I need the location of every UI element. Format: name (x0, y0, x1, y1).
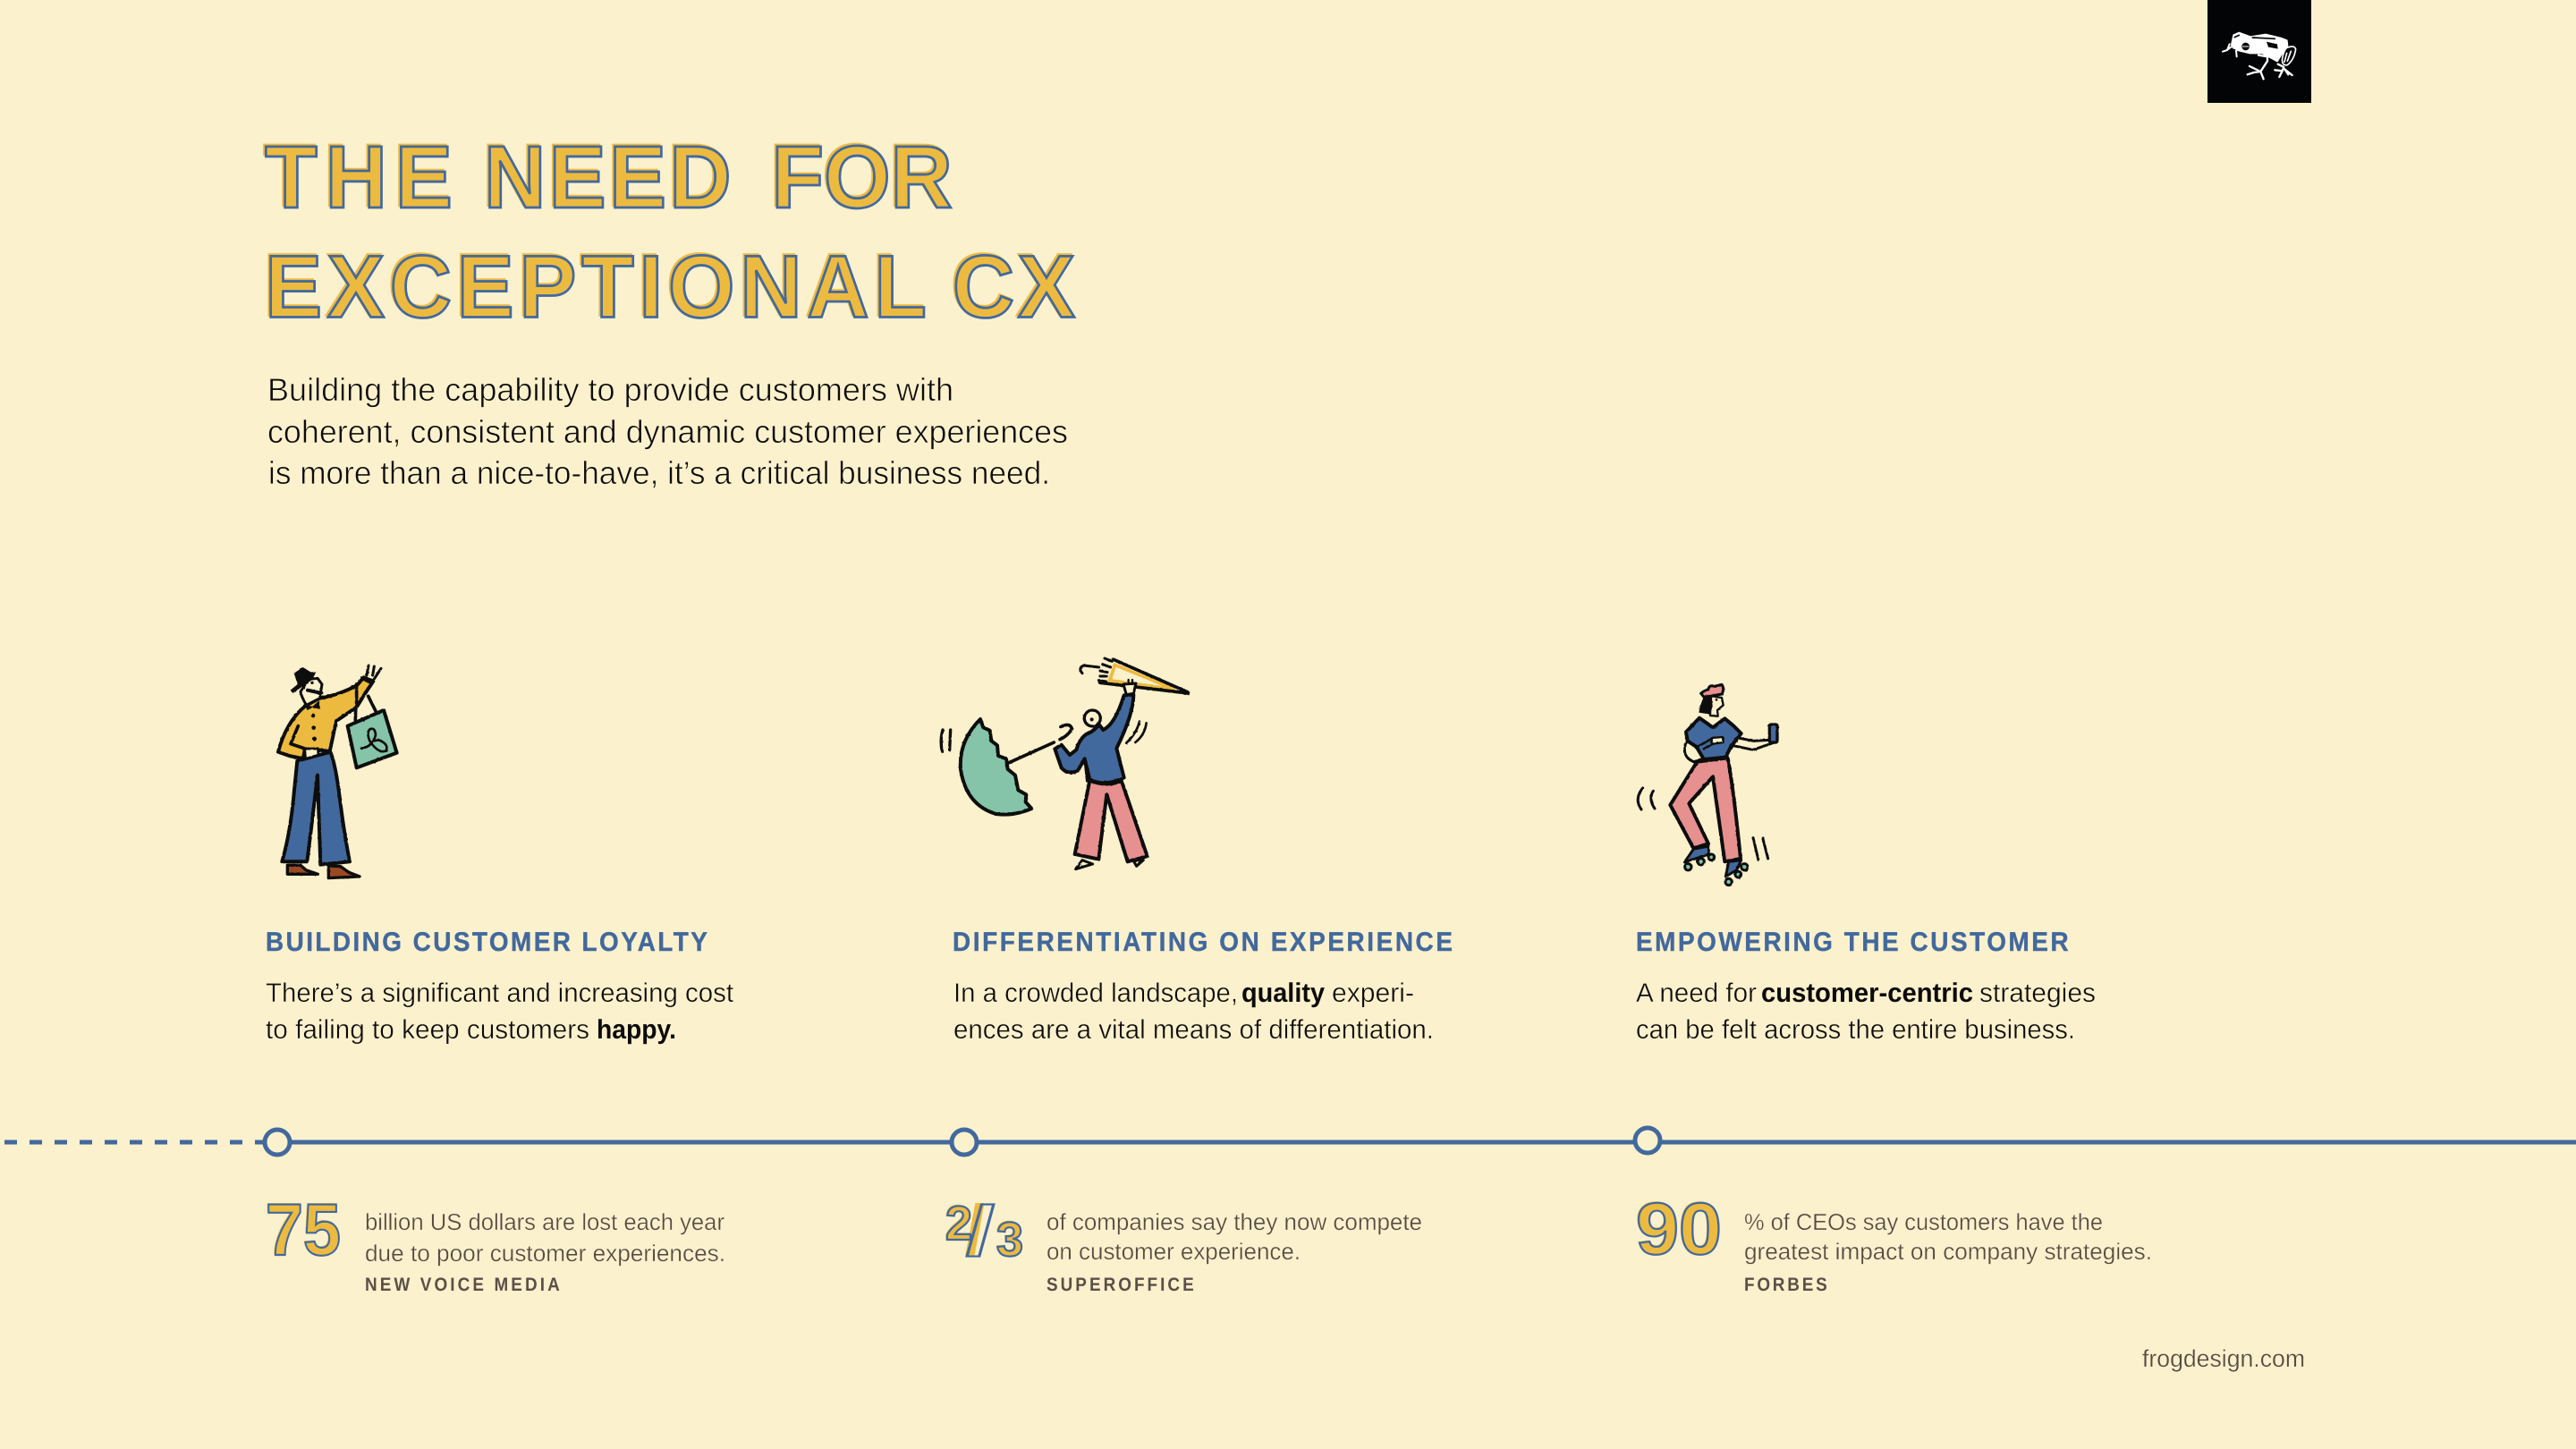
right arm (1732, 738, 1775, 750)
buttons and bow tie (305, 700, 320, 741)
stat text: greatest impact on company strategies. (1744, 1238, 2152, 1265)
title: CX (953, 236, 1079, 336)
title: NEED (482, 125, 733, 225)
number (945, 1191, 1023, 1270)
timeline node 2 (952, 1130, 977, 1155)
number: 3 (996, 1213, 1023, 1267)
pink hat (1701, 684, 1724, 697)
number: 75 (265, 1189, 340, 1270)
stat text: due to poor customer experiences. (365, 1240, 725, 1267)
title: EXCEPTIONAL (263, 234, 930, 335)
title: FOR (772, 127, 953, 226)
number: 90 (1636, 1189, 1722, 1270)
motion lines (1638, 788, 1768, 860)
umbrella shaft and hook (1008, 724, 1072, 763)
head and hair (1699, 696, 1724, 716)
number: 2 (945, 1196, 971, 1250)
title: FOR (770, 125, 951, 225)
title: THE (263, 125, 459, 225)
body text: A need for (1636, 979, 1757, 1008)
intro paragraph: is more than a nice-to-have, it’s a critical business need. (268, 454, 1050, 491)
body text: happy. (597, 1015, 676, 1045)
inverted umbrella (961, 719, 1031, 815)
illustration: roller skater with phone (1638, 684, 1777, 886)
blue top (1686, 718, 1741, 759)
body text: strategies (1979, 979, 2096, 1008)
body text: quality (1241, 979, 1325, 1008)
title: THE (265, 127, 461, 226)
number: / (966, 1191, 995, 1270)
body text: There’s a significant and increasing cost (266, 979, 734, 1008)
title (263, 125, 1079, 336)
phone (1769, 724, 1777, 742)
trousers (282, 752, 350, 865)
title: CX (951, 234, 1077, 335)
heading: BUILDING CUSTOMER LOYALTY (266, 928, 708, 957)
stat text: NEW VOICE MEDIA (365, 1275, 560, 1295)
body text: to failing to keep customers (266, 1015, 589, 1045)
motion lines right (1126, 722, 1147, 743)
left arm (1684, 741, 1706, 762)
motion lines left (941, 730, 951, 751)
number: 90 (1635, 1188, 1721, 1269)
hand (1123, 683, 1136, 695)
number: 75 (266, 1190, 341, 1271)
blown-out canopy (1080, 658, 1188, 693)
forearm and hand on chest (1696, 737, 1724, 749)
intro paragraph (267, 371, 1068, 491)
stat text: % of CEOs say customers have the (1744, 1208, 2103, 1235)
title: EXCEPTIONAL (265, 236, 932, 336)
body text: can be felt across the entire business. (1636, 1015, 2075, 1045)
raised fingers (367, 665, 381, 681)
number: / (965, 1191, 985, 1269)
body text (953, 979, 1434, 1045)
number: 2 (945, 1197, 972, 1250)
intro paragraph: coherent, consistent and dynamic customer experiences (267, 413, 1068, 450)
column 3: empowering the customer (1636, 928, 2096, 1045)
body text: In a crowded landscape, (953, 979, 1238, 1008)
stat text (1744, 1208, 2152, 1295)
shirt (278, 677, 373, 758)
number: 3 (996, 1212, 1022, 1266)
stat text: billion US dollars are lost each year (365, 1208, 724, 1235)
feet (1076, 860, 1143, 869)
hat (291, 667, 316, 693)
stat text: on customer experience. (1046, 1238, 1301, 1265)
logo: frog on black tile (2207, 0, 2311, 103)
head (1084, 710, 1100, 726)
pink trousers (1075, 781, 1148, 861)
head (301, 678, 322, 705)
hand at waist (305, 749, 318, 758)
intro paragraph: Building the capability to provide customers with (267, 371, 953, 408)
body text: experi- (1332, 979, 1414, 1008)
stat text: SUPEROFFICE (1046, 1275, 1194, 1295)
stat 3: 90 (1635, 1188, 2152, 1295)
illustration: man with shopping bag (278, 665, 397, 878)
timeline node 1 (265, 1130, 290, 1155)
body text (266, 979, 734, 1045)
heading: EMPOWERING THE CUSTOMER (1636, 928, 2069, 957)
stat text: of companies say they now compete (1046, 1208, 1422, 1235)
shoes (287, 865, 318, 874)
blue jumper (1055, 695, 1133, 783)
timeline node 3 (1635, 1128, 1660, 1153)
illustration: person with broken umbrella (941, 658, 1188, 869)
stat 2: two thirds (945, 1191, 1422, 1295)
body text (1636, 979, 2096, 1045)
stat text (1046, 1208, 1422, 1295)
column 2: differentiating on experience (953, 928, 1453, 1045)
bag (348, 689, 397, 767)
stat 1: 75 (265, 1189, 725, 1295)
column 1: building customer loyalty (266, 928, 734, 1045)
heading: DIFFERENTIATING ON EXPERIENCE (953, 928, 1453, 957)
stat text: FORBES (1744, 1275, 1827, 1295)
body text: customer-centric (1761, 979, 1973, 1008)
timeline (4, 1128, 2576, 1155)
skates (1684, 846, 1748, 886)
pink trousers (1670, 758, 1741, 861)
stat text (365, 1208, 725, 1295)
title: NEED (484, 127, 734, 226)
body text: ences are a vital means of differentiation. (953, 1015, 1434, 1045)
footer url: frogdesign.com (2142, 1345, 2305, 1372)
